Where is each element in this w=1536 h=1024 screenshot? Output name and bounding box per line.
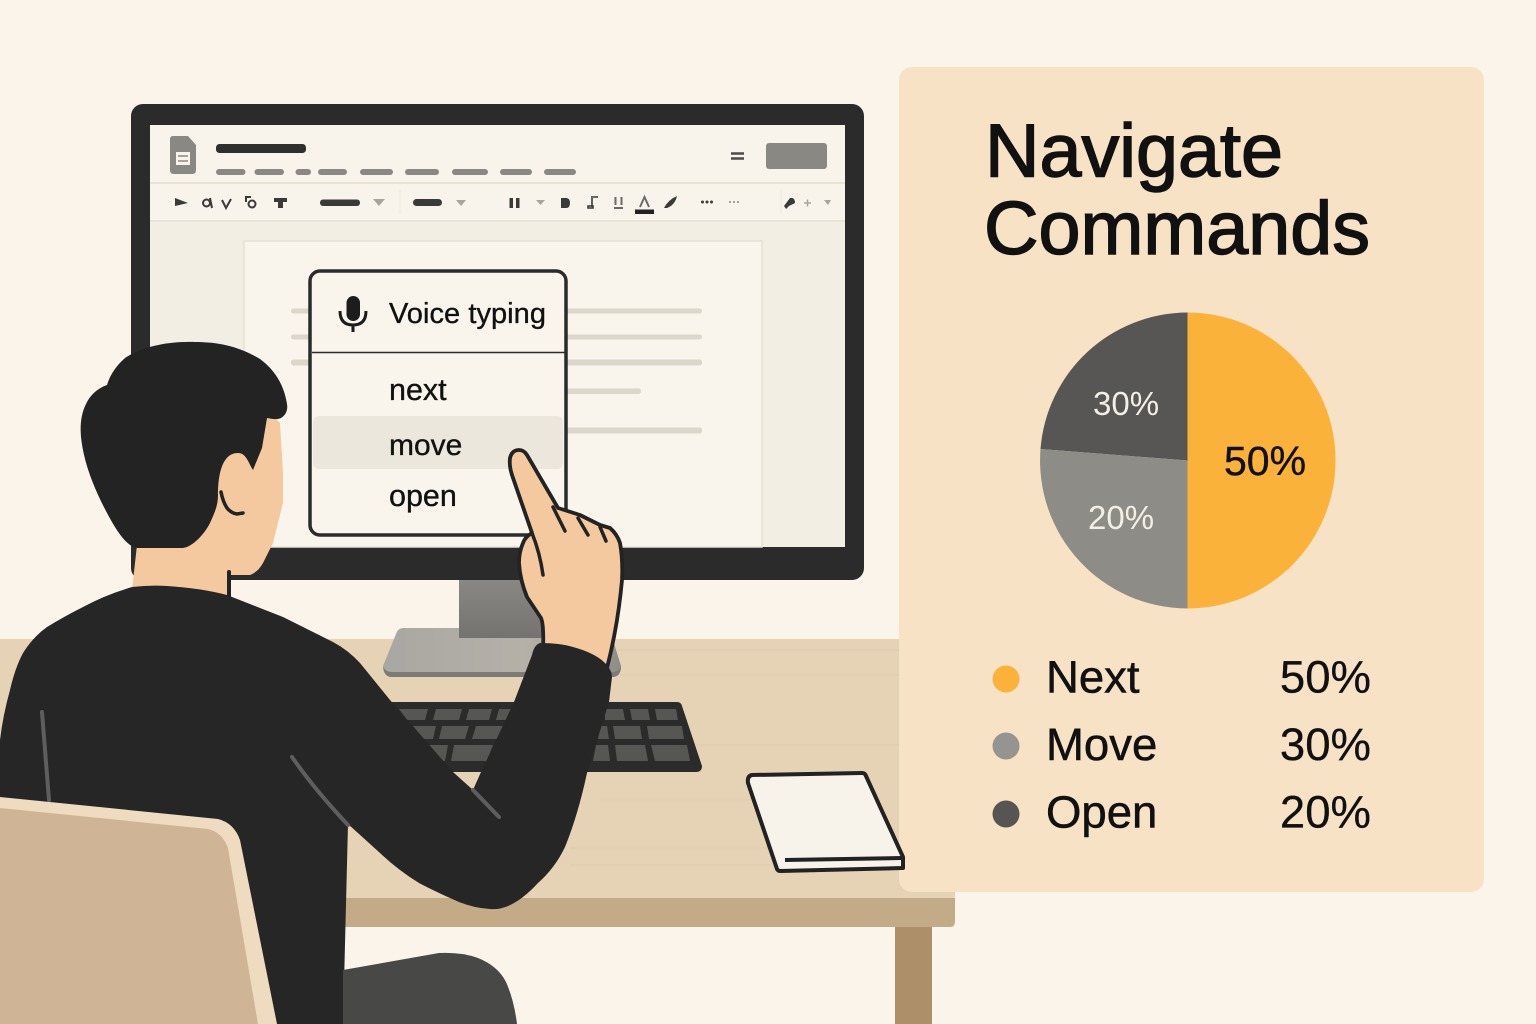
menu icon <box>731 154 744 158</box>
ear line <box>221 492 243 514</box>
title line two: Commands <box>984 186 1370 270</box>
slice label 30%: 30% <box>1093 385 1159 422</box>
monitor stand <box>383 578 621 677</box>
document page <box>244 241 762 547</box>
person: hand pointing <box>510 450 622 668</box>
pie chart <box>1040 312 1336 608</box>
monitor <box>131 104 864 580</box>
toolbar icons <box>175 196 831 214</box>
legend row: next: 50% <box>1280 652 1371 702</box>
option: move: move <box>389 429 462 462</box>
title: Navigate <box>985 108 1283 192</box>
option: next: next <box>389 373 447 407</box>
slice label 50%: 50% <box>1224 438 1306 484</box>
icon: microphone <box>340 296 366 332</box>
app icon <box>170 136 196 174</box>
legend row: open: 20% <box>1280 786 1371 838</box>
legend <box>992 652 1371 838</box>
document title bar <box>216 144 306 153</box>
legend row: next: Next <box>1046 652 1140 702</box>
person: torso and arm <box>0 586 612 1024</box>
desk <box>0 639 955 1024</box>
legend row: move <box>992 719 1371 770</box>
legend row: move: Move <box>1046 719 1157 770</box>
chair back <box>0 797 277 1024</box>
person: head and neck <box>81 342 287 598</box>
share button <box>766 143 827 169</box>
option: open: open <box>389 479 457 513</box>
legend row: move: 30% <box>1280 719 1371 770</box>
hair <box>81 342 287 548</box>
heading: Voice typing <box>389 298 546 330</box>
slice label 20%: 20% <box>1088 499 1154 536</box>
legend row: open <box>992 786 1371 838</box>
screen <box>150 125 845 547</box>
highlighted row <box>313 416 563 469</box>
legend row: open: Open <box>1046 786 1157 838</box>
voice typing popup <box>310 271 566 535</box>
legend row: next <box>992 652 1371 702</box>
neck and face <box>132 410 283 597</box>
document text lines <box>291 308 702 434</box>
notebook <box>748 773 903 871</box>
sleeve creases <box>42 712 499 825</box>
menu bar <box>216 169 576 175</box>
keyboard <box>385 702 702 772</box>
panel: navigate commands <box>899 67 1484 892</box>
chair seat <box>343 953 517 1024</box>
